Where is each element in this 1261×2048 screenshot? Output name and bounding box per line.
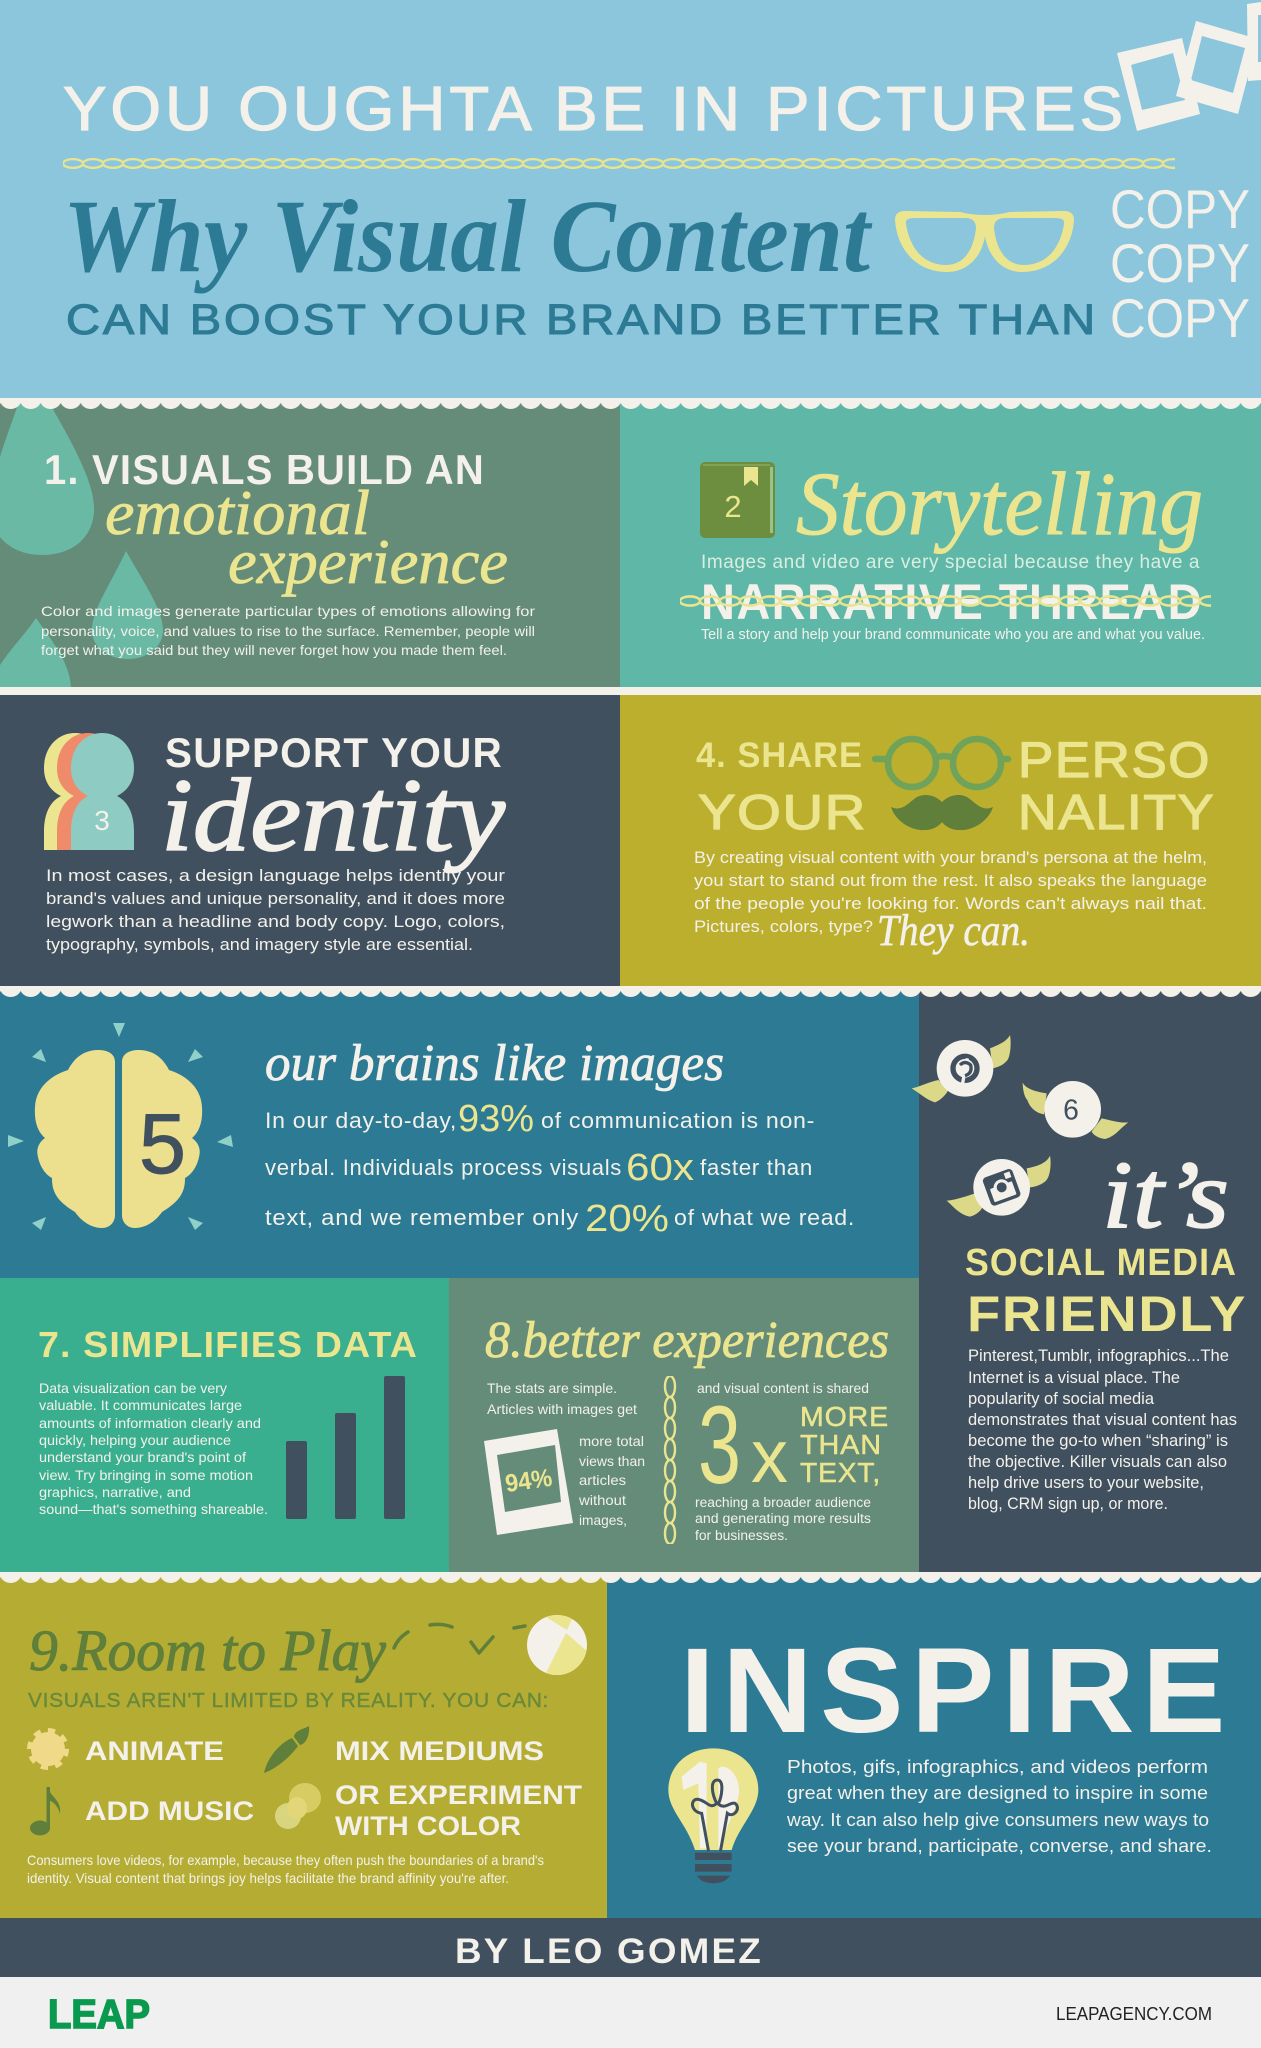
text block: forget what you said but they will never forget how you made them feel.: [41, 642, 507, 658]
text block: [694, 849, 1207, 936]
panel 4: share your personality: [620, 695, 1261, 986]
icon: yellow glasses: [895, 211, 1074, 272]
chain divider: [63, 158, 1175, 169]
text block: help drive users to your website,: [968, 1474, 1204, 1492]
icon: layered silhouettes: 3: [94, 805, 110, 836]
text block: Color and images generate particular types of emotions allowing for: [41, 603, 535, 619]
icon: color blobs: [275, 1783, 321, 1829]
text line with 60x: verbal. Individuals process visuals: [265, 1155, 622, 1180]
heading: friendly: FRIENDLY: [967, 1286, 1247, 1342]
text: more total views: [578, 1433, 645, 1528]
url: LEAPAGENCY.COM: [1056, 2004, 1212, 2024]
text block: sound—that's something shareable.: [39, 1501, 268, 1517]
text line with 20%: 20%: [585, 1198, 669, 1240]
text: more total views: articles: [579, 1472, 626, 1488]
footer: [0, 1977, 1261, 2048]
text block: [46, 866, 505, 954]
text: more total views: without: [578, 1492, 626, 1508]
text block: quickly, helping your audience: [39, 1432, 231, 1448]
icon: winged instagram: [947, 1156, 1051, 1217]
white divider: [0, 687, 1261, 695]
text block: Pinterest,Tumblr, infographics...The: [968, 1347, 1229, 1365]
text block: [41, 603, 535, 658]
heading: identity: identity: [161, 758, 506, 873]
text block: valuable. It communicates large: [39, 1397, 242, 1413]
panel 5: our brains like images: [0, 986, 919, 1278]
icon: winged number 6: [1023, 1081, 1128, 1139]
text line with 93%: 93%: [458, 1098, 534, 1140]
text block: [786, 1756, 1212, 1856]
heading: support your: SUPPORT YOUR: [165, 729, 503, 776]
heading: visuals build an: 1. VISUALS BUILD AN: [44, 446, 485, 493]
icon: layered silhouettes: [44, 733, 134, 850]
text block: legwork than a headline and body copy. Logo, colors,: [46, 912, 505, 931]
panel 6: social media friendly: [912, 986, 1261, 1572]
icon: beach ball: [527, 1615, 587, 1675]
icon: book: 2: [724, 489, 742, 524]
text block: [27, 1852, 544, 1886]
icon: brain: [35, 1050, 202, 1228]
heading: perso: PERSO: [1018, 732, 1211, 788]
label: or experiment with color: [335, 1780, 583, 1841]
text block: blog, CRM sign up, or more.: [968, 1495, 1168, 1513]
panel 8: better experiences: [449, 1278, 919, 1572]
text block: brand's values and unique personality, and it does more: [46, 889, 505, 908]
text block: view. Try bringing in some motion: [39, 1467, 253, 1483]
heading: share: 4. SHARE: [696, 736, 863, 775]
icon: brain: 5: [139, 1097, 186, 1192]
stat: 3x: x: [751, 1414, 788, 1498]
icon: gear: [30, 1731, 66, 1767]
credit bar: by leo gomez: BY LEO GOMEZ: [455, 1932, 763, 1971]
icon: brain rays: [8, 1023, 233, 1230]
vertical chain: [663, 1376, 677, 1544]
heading: inspire: INSPIRE: [680, 1622, 1233, 1758]
icon: winged number 6: 6: [1063, 1094, 1079, 1126]
heading: social media: SOCIAL MEDIA: [965, 1242, 1237, 1284]
text block: way. It can also help give consumers new ways to: [786, 1809, 1209, 1830]
text: more total views: more total: [579, 1433, 644, 1449]
text: tell a story: Tell a story and help your brand communicate who you are and what you value.: [701, 627, 1205, 643]
stat: more than text: THAN: [800, 1429, 882, 1460]
scalloped edge dividers: [0, 398, 1261, 1583]
heading: your: YOUR: [698, 786, 867, 840]
text block: graphics, narrative, and: [39, 1484, 191, 1500]
icon: polaroid with 94%: 94%: [503, 1464, 554, 1498]
text block: typography, symbols, and imagery style are essential.: [46, 935, 473, 954]
heading: emotional: emotional: [105, 477, 370, 548]
panel 10: inspire: [607, 1572, 1261, 1918]
icon: round glasses: [875, 739, 1008, 787]
text line with 93%: In our day-to-day,: [265, 1108, 457, 1133]
text line with 20%: of what we read.: [674, 1205, 855, 1230]
text: reaching a broader audience: for businesses.: [695, 1528, 788, 1543]
logo: leap: LEAP: [48, 1991, 150, 2037]
text line with 20%: [265, 1198, 855, 1240]
text: narrative intro: Images and video are very special because they have a: [701, 552, 1200, 573]
text block: see your brand, participate, converse, and share.: [787, 1835, 1212, 1856]
heading: narrative thread: NARRATIVE THREAD: [701, 574, 1203, 630]
icon: music note: [30, 1787, 60, 1836]
subheading: can boost your brand better than: CAN BOOST YOUR BRAND BETTER THAN: [66, 296, 1098, 344]
panel: header: [0, 0, 1261, 398]
text: reaching a broader audience: and generating more results: [695, 1511, 871, 1526]
subheading: visuals aren't limited: VISUALS AREN'T LIMITED BY REALITY. YOU CAN:: [28, 1690, 549, 1712]
label: mix mediums: MIX MEDIUMS: [335, 1736, 544, 1766]
text line with 20%: text, and we remember only: [265, 1205, 579, 1230]
stat: 3x: 3: [698, 1384, 741, 1507]
stat: more than text: MORE: [800, 1401, 889, 1432]
bar chart: [286, 1376, 405, 1519]
panel 1: emotional experience: [0, 403, 620, 687]
text block: you start to stand out from the rest. It also speaks the language: [694, 872, 1207, 890]
heading: storytelling: Storytelling: [796, 455, 1203, 554]
panel 9: room to play: [0, 1572, 607, 1918]
script: it's: it’s: [1102, 1141, 1229, 1248]
text block: great when they are designed to inspire in some: [787, 1782, 1208, 1803]
text block: By creating visual content with your brand's persona at the helm,: [694, 849, 1207, 867]
text block: Photos, gifs, infographics, and videos perform: [787, 1756, 1208, 1777]
text: stats intro: The stats are simple.: [487, 1380, 617, 1396]
text: reaching a broader audience: reaching a broader audience: [695, 1495, 871, 1510]
text: more total views: images,: [579, 1512, 627, 1528]
heading: experience: experience: [228, 526, 508, 597]
icon: paint brush: [264, 1726, 309, 1773]
panel 7: simplifies data: [0, 1278, 449, 1572]
text: stats intro: [487, 1380, 637, 1417]
heading: our brains like images: our brains like images: [265, 1035, 724, 1092]
label: animate: ANIMATE: [85, 1736, 224, 1766]
text block: amounts of information clearly and: [39, 1415, 261, 1431]
heading: nality: NALITY: [1018, 786, 1215, 840]
stat: more than text: TEXT,: [800, 1457, 881, 1488]
icon: book: [700, 462, 775, 538]
text block: popularity of social media: [968, 1390, 1155, 1408]
title: you oughta be in pictures: YOU OUGHTA BE IN PICTURES: [63, 75, 1127, 144]
text block: Data visualization can be very: [39, 1380, 227, 1396]
icon: ball motion marks: [394, 1624, 525, 1653]
text: reaching a broader audience: [695, 1495, 871, 1543]
text block: Pictures, colors, type?: [694, 918, 873, 936]
text block: identity. Visual content that brings joy helps facilitate the brand affinity you're after.: [27, 1870, 509, 1886]
text block: understand your brand's point of: [39, 1449, 246, 1465]
script: they can: They can.: [877, 906, 1030, 955]
heading: simplifies data: 7. SIMPLIFIES DATA: [38, 1324, 418, 1365]
icon: teardrops: [0, 403, 163, 687]
text block: the objective. Killer visuals can also: [968, 1453, 1227, 1471]
text block: demonstrates that visual content has: [968, 1411, 1237, 1429]
credit bar: by leo gomez: [0, 1918, 1261, 1977]
text line with 60x: 60x: [626, 1147, 694, 1189]
icon: moustache: [891, 795, 993, 830]
label: or experiment with color: OR EXPERIMENT: [335, 1780, 583, 1810]
text block: Consumers love videos, for example, because they often push the boundaries of a brand's: [27, 1852, 544, 1868]
text block: [39, 1380, 268, 1517]
chain overlay: [680, 595, 1211, 607]
text line with 93%: of communication is non-: [541, 1108, 815, 1133]
icon: winged social badges: [912, 1035, 1128, 1217]
stat: more than text: [800, 1401, 889, 1488]
icon: light bulb: [668, 1748, 758, 1883]
text: more total views: views than: [579, 1453, 645, 1469]
text block: of the people you're looking for. Words can't always nail that.: [694, 895, 1207, 913]
text block: In most cases, a design language helps identify your: [46, 866, 505, 885]
text: stats intro: Articles with images get: [487, 1401, 637, 1417]
text block: Internet is a visual place. The: [968, 1369, 1180, 1387]
text block: [968, 1347, 1237, 1513]
icon: winged pinterest: [912, 1035, 1011, 1102]
panel 3: identity: [0, 695, 620, 986]
label: add music: ADD MUSIC: [85, 1796, 254, 1826]
text block: become the go-to when “sharing” is: [968, 1432, 1228, 1450]
heading: room to play: 9.Room to Play: [29, 1618, 386, 1683]
text line with 93%: [265, 1098, 815, 1140]
heading: why visual content: Why Visual Content: [63, 179, 873, 294]
text: copy copy copy: [1110, 178, 1250, 349]
text: shared: and visual content is shared: [697, 1380, 869, 1396]
heading: better experiences: 8.better experiences: [485, 1312, 889, 1369]
label: or experiment with color: WITH COLOR: [335, 1811, 521, 1841]
text line with 60x: [265, 1147, 813, 1189]
text line with 60x: faster than: [700, 1155, 813, 1180]
icon: polaroid frames: [1117, 2, 1261, 131]
panel 2: storytelling: [620, 398, 1261, 687]
icon: polaroid with 94%: [484, 1429, 573, 1535]
stat: 3x: [698, 1384, 788, 1507]
text block: personality, voice, and values to rise to the surface. Remember, people will: [41, 623, 535, 639]
